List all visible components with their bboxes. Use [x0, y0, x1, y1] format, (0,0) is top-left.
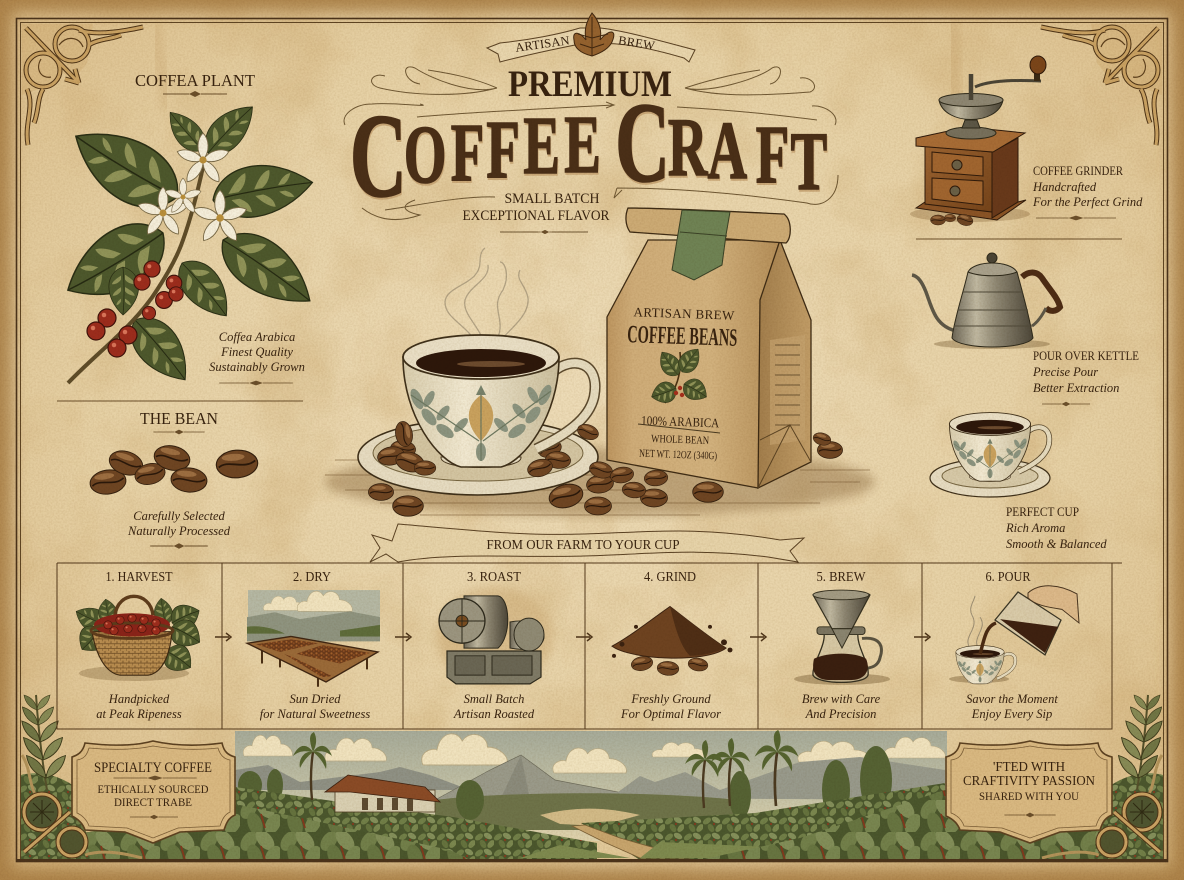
step 4: grind: 4. GRIND — [644, 569, 696, 584]
tagline: EXCEPTIONAL FLAVOR — [462, 208, 610, 224]
step 1: harvest: at Peak Ripeness — [96, 707, 182, 721]
step 5: brew: 5. BREW — [816, 569, 866, 584]
title: coffee craft: C — [350, 89, 407, 222]
illustration: coffee bean bag — [607, 208, 811, 488]
kettle text: POUR OVER KETTLE — [1033, 348, 1139, 363]
badge text: SHARED WITH YOU — [979, 789, 1079, 803]
kettle text: Precise Pour — [1032, 365, 1098, 379]
step 3: roast — [437, 569, 553, 721]
step 4: grind: For Optimal Flavor — [620, 707, 721, 721]
plant description: Coffea Arabica — [219, 330, 295, 344]
plant description: Sustainably Grown — [209, 360, 305, 374]
bean description: Naturally Processed — [127, 524, 231, 538]
grinder text: Handcrafted — [1032, 180, 1097, 194]
step 3: roast: 3. ROAST — [467, 569, 522, 584]
bag label text: NET WT. 12OZ (340G) — [639, 448, 718, 462]
title: premium: PREMIUM — [508, 64, 672, 105]
artisan brew ribbon — [487, 28, 695, 62]
step 2: dry — [247, 569, 380, 721]
step 6: pour: Enjoy Every Sip — [971, 707, 1052, 721]
heading: coffea plant: COFFEA PLANT — [135, 71, 255, 90]
badge: specialty coffee — [72, 741, 235, 843]
illustration: pour over kettle — [912, 253, 1060, 349]
banner: from our farm to your cup — [370, 524, 804, 562]
grinder text: For the Perfect Grind — [1032, 195, 1143, 209]
banner: from our farm to your cup: FROM OUR FARM TO YOUR CUP — [486, 538, 680, 553]
title flourishes — [344, 67, 838, 232]
badge text: 'FTED WITH — [993, 760, 1065, 775]
icon: coffee leaf emblem — [574, 13, 614, 56]
step 4: grind: Freshly Ground — [630, 692, 711, 706]
illustration: coffee grinder — [910, 56, 1046, 227]
step 1: harvest — [71, 569, 207, 721]
scattered coffee beans — [368, 422, 843, 516]
title: coffee craft: OFFEE — [404, 99, 601, 201]
table surface shadow — [325, 448, 875, 516]
illustration: coffee beans — [89, 443, 259, 496]
badge: crafted with passion — [946, 741, 1112, 843]
bean description — [127, 509, 231, 549]
title block — [344, 13, 838, 234]
bean description: Carefully Selected — [133, 509, 226, 523]
bag label text — [627, 304, 738, 462]
icon: roasting machine — [437, 586, 553, 687]
step 6: pour — [949, 569, 1079, 721]
badge text — [963, 760, 1095, 817]
bag label text: WHOLE BEAN — [651, 433, 709, 447]
title: coffee craft: C — [615, 79, 670, 207]
step 2: dry: Sun Dried — [289, 692, 341, 706]
badge text: ETHICALLY SOURCED — [98, 782, 209, 796]
farmhouse — [325, 775, 440, 812]
step 2: dry: 2. DRY — [293, 569, 331, 584]
grinder text — [1032, 163, 1143, 220]
badge text — [94, 760, 212, 819]
bag label text: COFFEE BEANS — [627, 321, 738, 352]
icon: basket — [71, 596, 207, 681]
perfect cup text: Rich Aroma — [1005, 521, 1065, 535]
icon: drying beds — [247, 590, 380, 687]
grinder text: COFFEE GRINDER — [1033, 163, 1123, 178]
step 6: pour: 6. POUR — [986, 569, 1030, 584]
bottom right corner foliage — [1042, 695, 1163, 860]
bottom plantation landscape — [72, 730, 1112, 860]
badge text: SPECIALTY COFFEE — [94, 760, 212, 776]
title: coffee craft: RAFT — [668, 102, 827, 208]
perfect cup text: PERFECT CUP — [1006, 504, 1079, 519]
bag label text: ARTISAN BREW — [633, 304, 735, 323]
tagline — [462, 191, 610, 224]
bottom frame band — [17, 859, 1167, 862]
perfect cup text — [1005, 504, 1107, 551]
icon: ground coffee pile — [612, 607, 732, 676]
step 5: brew: Brew with Care — [802, 692, 881, 706]
green label tab — [672, 210, 730, 280]
step 6: pour: Savor the Moment — [966, 692, 1058, 706]
heading: the bean: THE BEAN — [140, 409, 218, 428]
bag sprig — [648, 344, 712, 407]
step 5: brew: And Precision — [805, 707, 876, 721]
icon: pour over dripper — [794, 590, 890, 685]
badge text: DIRECT TRABE — [114, 795, 192, 809]
step 3: roast: Artisan Roasted — [453, 707, 535, 721]
perfect cup text: Smooth & Balanced — [1006, 537, 1107, 551]
step 4: grind — [612, 569, 732, 721]
artisan brew ribbon: BREW — [617, 33, 656, 53]
kettle text: Better Extraction — [1033, 381, 1119, 395]
illustration: perfect cup — [930, 413, 1050, 497]
illustration: coffee cup on saucer — [358, 248, 598, 495]
step 3: roast: Small Batch — [464, 692, 524, 706]
bag label text: 100% ARABICA — [641, 413, 720, 430]
tagline: SMALL BATCH — [504, 191, 600, 207]
process section frame — [57, 563, 1122, 729]
step 2: dry: for Natural Sweetness — [260, 707, 370, 721]
plant description: Finest Quality — [220, 345, 293, 359]
step 5: brew — [794, 569, 890, 721]
bottom left corner foliage — [21, 695, 142, 860]
steam — [445, 248, 528, 350]
step 1: harvest: Handpicked — [108, 692, 170, 706]
plant description — [209, 330, 305, 385]
icon: pouring carafe into cup — [949, 586, 1079, 684]
step 1: harvest: 1. HARVEST — [106, 569, 173, 584]
kettle text — [1032, 348, 1139, 406]
badge text: CRAFTIVITY PASSION — [963, 774, 1095, 789]
illustration: coffee plant branch — [53, 95, 325, 392]
artisan brew ribbon: ARTISAN — [514, 33, 571, 55]
